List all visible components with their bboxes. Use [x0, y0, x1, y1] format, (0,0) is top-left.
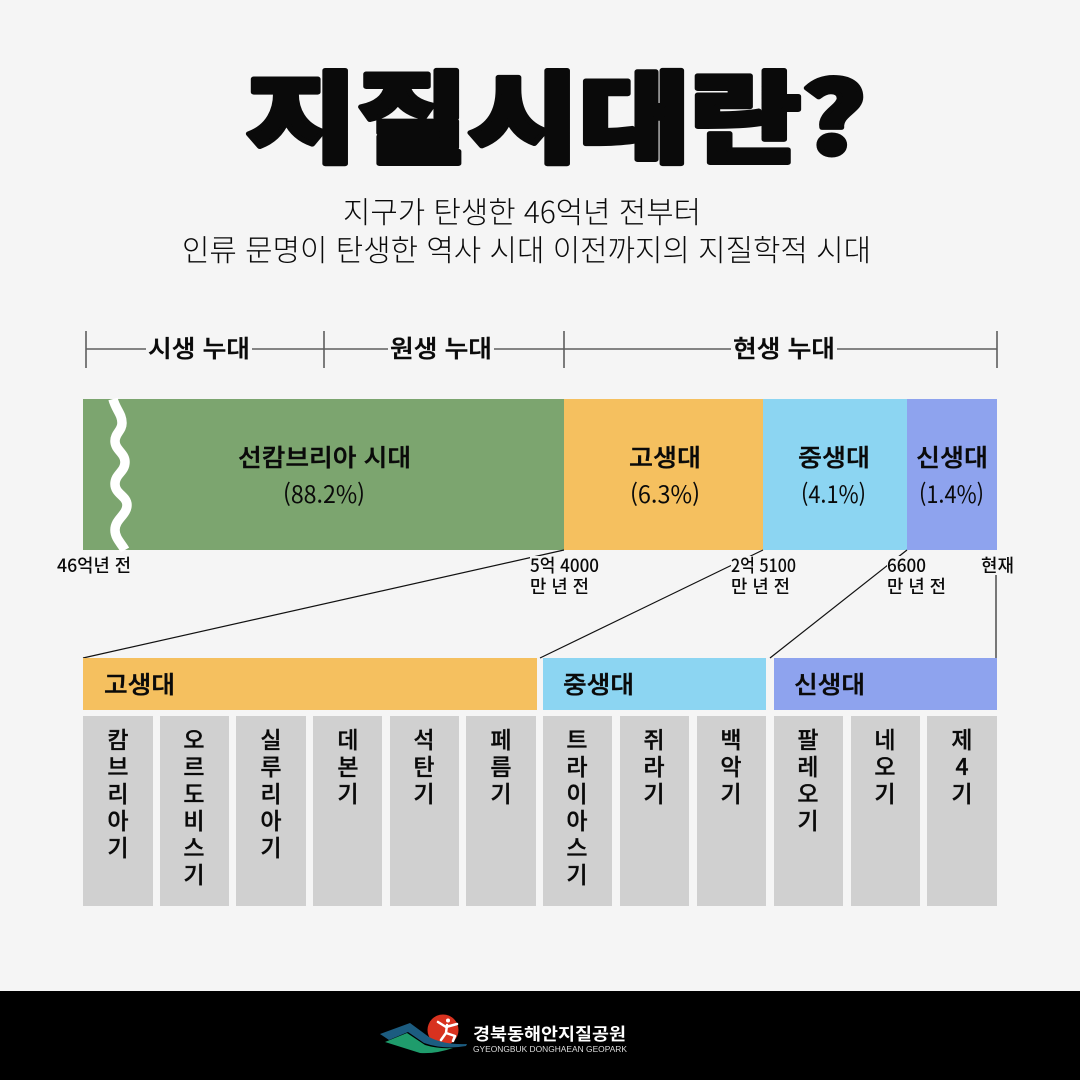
logo wordmark — [473, 1020, 627, 1054]
period: Carboniferous — [390, 716, 459, 906]
period: Neogene: 네 — [874, 721, 896, 755]
period: Devonian: 데 — [337, 721, 359, 755]
label: 540 Ma: 만 년 전 — [530, 573, 589, 599]
period: Jurassic: 라 — [643, 748, 665, 782]
period: Paleogene — [774, 716, 843, 906]
period: Jurassic: 쥐 — [643, 721, 665, 755]
era header: Mesozoic: 중생대 — [563, 665, 634, 700]
period: Silurian: 실 — [260, 721, 282, 755]
period: Silurian: 기 — [260, 829, 282, 863]
period: Cambrian: 기 — [107, 829, 129, 863]
label: 251 Ma: 만 년 전 — [731, 573, 790, 599]
time labels: 46억년 전 — [57, 552, 131, 578]
period: Silurian — [236, 716, 306, 906]
eon timeline scale — [86, 329, 997, 368]
period: Cambrian — [83, 716, 153, 906]
period: Cretaceous — [697, 716, 766, 906]
period: Silurian: 루 — [260, 748, 282, 782]
era header: Paleozoic: 고생대 — [104, 665, 175, 700]
segment: Cenozoic: 신생대 — [916, 438, 988, 473]
period: Triassic — [543, 716, 612, 906]
period: Ordovician: 도 — [183, 775, 205, 809]
label: 540 Ma — [530, 552, 600, 599]
period: Triassic: 트 — [566, 721, 588, 755]
period: Cambrian: 브 — [107, 748, 129, 782]
period: Devonian: 본 — [337, 748, 359, 782]
period: Cretaceous: 악 — [720, 748, 742, 782]
period: Ordovician: 기 — [183, 856, 205, 890]
eon label: 현생 누대: 현생 누대 — [733, 329, 835, 364]
period: Jurassic: 기 — [643, 775, 665, 809]
eon label: 원생 누대: 원생 누대 — [390, 329, 492, 364]
period: Ordovician: 비 — [183, 802, 205, 836]
era header: Cenozoic — [774, 658, 997, 710]
footer bar — [0, 991, 1080, 1080]
label: present: 현재 — [981, 552, 1014, 578]
segment: Precambrian: 선캄브리아 시대 — [238, 438, 411, 473]
connector lines — [83, 550, 996, 658]
title: 지질시대란? — [246, 39, 866, 183]
period: Quaternary: 기 — [951, 775, 973, 809]
period: Carboniferous: 탄 — [413, 748, 435, 782]
period: Paleogene: 기 — [797, 802, 819, 836]
segment: Mesozoic — [763, 399, 907, 550]
era header: Cenozoic: 신생대 — [794, 665, 865, 700]
period: Carboniferous: 기 — [413, 775, 435, 809]
period: Triassic: 스 — [566, 829, 588, 863]
segment: Paleozoic — [564, 399, 763, 550]
segment: Cenozoic: (1.4%) — [919, 475, 984, 510]
label: 66 Ma: 만 년 전 — [887, 573, 946, 599]
period: Neogene: 기 — [874, 775, 896, 809]
segment: Cenozoic — [907, 399, 997, 550]
period columns — [83, 716, 997, 906]
period: Ordovician: 르 — [183, 748, 205, 782]
logo icon — [380, 1014, 467, 1053]
period: Quaternary: 제 — [951, 721, 973, 755]
segment: Mesozoic: (4.1%) — [801, 475, 866, 510]
era header: Paleozoic — [83, 658, 537, 710]
label: 251 Ma: 2억 5100 — [731, 552, 796, 578]
label: 66 Ma — [887, 552, 946, 599]
eon label: 시생 누대: 시생 누대 — [148, 329, 250, 364]
period: Carboniferous: 석 — [413, 721, 435, 755]
label: 66 Ma: 6600 — [887, 552, 926, 578]
period: Cretaceous: 백 — [720, 721, 742, 755]
period: Ordovician: 오 — [183, 721, 205, 755]
period: Neogene: 오 — [874, 748, 896, 782]
period: Ordovician — [160, 716, 229, 906]
subtitle — [182, 188, 871, 270]
period: Silurian: 리 — [260, 775, 282, 809]
subtitle: 지구가 탄생한 46억년 전부터 — [343, 188, 701, 232]
segment: Paleozoic: 고생대 — [629, 438, 701, 473]
period: Triassic: 라 — [566, 748, 588, 782]
period: Cambrian: 아 — [107, 802, 129, 836]
period: Quaternary — [927, 716, 997, 906]
period: Ordovician: 스 — [183, 829, 205, 863]
period: Devonian: 기 — [337, 775, 359, 809]
footer logo — [380, 1014, 627, 1054]
period: Permian: 기 — [490, 775, 512, 809]
segment: Precambrian — [83, 399, 564, 550]
period: Paleogene: 레 — [797, 748, 819, 782]
time labels — [57, 552, 1014, 599]
period: Permian: 페 — [490, 721, 512, 755]
period: Cretaceous: 기 — [720, 775, 742, 809]
period: Triassic: 기 — [566, 856, 588, 890]
subtitle: 인류 문명이 탄생한 역사 시대 이전까지의 지질학적 시대 — [182, 226, 871, 270]
label: 251 Ma — [731, 552, 797, 599]
segment: Paleozoic: (6.3%) — [630, 475, 700, 510]
period: Paleogene: 팔 — [797, 721, 819, 755]
period: Triassic: 아 — [566, 802, 588, 836]
period: Permian — [466, 716, 536, 906]
proportion bar — [83, 399, 997, 550]
segment: Mesozoic: 중생대 — [798, 438, 870, 473]
period: Cambrian: 리 — [107, 775, 129, 809]
period: Jurassic — [620, 716, 689, 906]
period: Silurian: 아 — [260, 802, 282, 836]
label: 540 Ma: 5억 4000 — [530, 552, 599, 578]
logo wordmark: GYEONGBUK DONGHAEAN GEOPARK — [473, 1044, 627, 1054]
period: Quaternary: 4 — [955, 748, 969, 782]
segment: Precambrian: (88.2%) — [283, 475, 365, 510]
era header: Mesozoic — [543, 658, 766, 710]
logo wordmark: 경북동해안지질공원 — [473, 1020, 626, 1045]
period: Permian: 름 — [490, 748, 512, 782]
period: Triassic: 이 — [566, 775, 588, 809]
period: Cambrian: 캄 — [107, 721, 129, 755]
period: Neogene — [851, 716, 920, 906]
period: Devonian — [313, 716, 382, 906]
period: Paleogene: 오 — [797, 775, 819, 809]
